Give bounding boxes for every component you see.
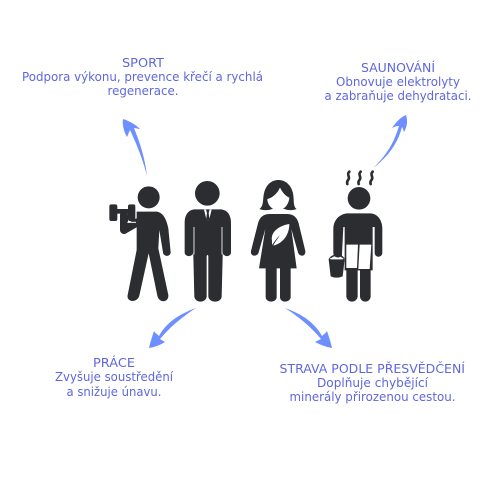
text block: strava podle přesvědčení: STRAVA PODLE PŘESVĚDČENÍ	[280, 361, 465, 376]
icon: steam	[347, 172, 373, 184]
text block: strava podle přesvědčení: Doplňuje chybějící	[317, 376, 429, 390]
arrow: to práce	[149, 308, 196, 348]
text block: strava podle přesvědčení	[280, 361, 465, 404]
text block: saunování: Obnovuje elektrolyty	[336, 75, 460, 89]
arrow: to sport	[123, 119, 147, 176]
text block: práce: PRÁCE	[93, 355, 135, 370]
icon: man in sauna with towel and bucket	[329, 172, 382, 302]
icon: leaf on dress	[272, 224, 289, 246]
text block: sport: regenerace.	[108, 84, 178, 98]
text block: práce: a snižuje únavu.	[66, 385, 162, 399]
text block: práce: Zvyšuje soustředění	[55, 370, 174, 384]
arrow: to strava	[285, 308, 332, 348]
text block: saunování	[324, 60, 472, 103]
text block: sport: Podpora výkonu, prevence křečí a rychlá	[22, 70, 263, 84]
text block: saunování: a zabraňuje dehydrataci.	[324, 89, 472, 103]
arrow: to saunování	[373, 115, 407, 168]
icon: man in suit	[185, 181, 231, 302]
text block: strava podle přesvědčení: minerály přirozenou cestou.	[290, 390, 456, 404]
text block: práce	[55, 355, 174, 399]
text block: sport	[22, 56, 263, 98]
icon: athlete with dumbbell	[109, 186, 171, 301]
icon: woman with leaf	[251, 180, 305, 302]
text block: sport: SPORT	[122, 56, 165, 70]
text block: saunování: SAUNOVÁNÍ	[361, 60, 435, 75]
